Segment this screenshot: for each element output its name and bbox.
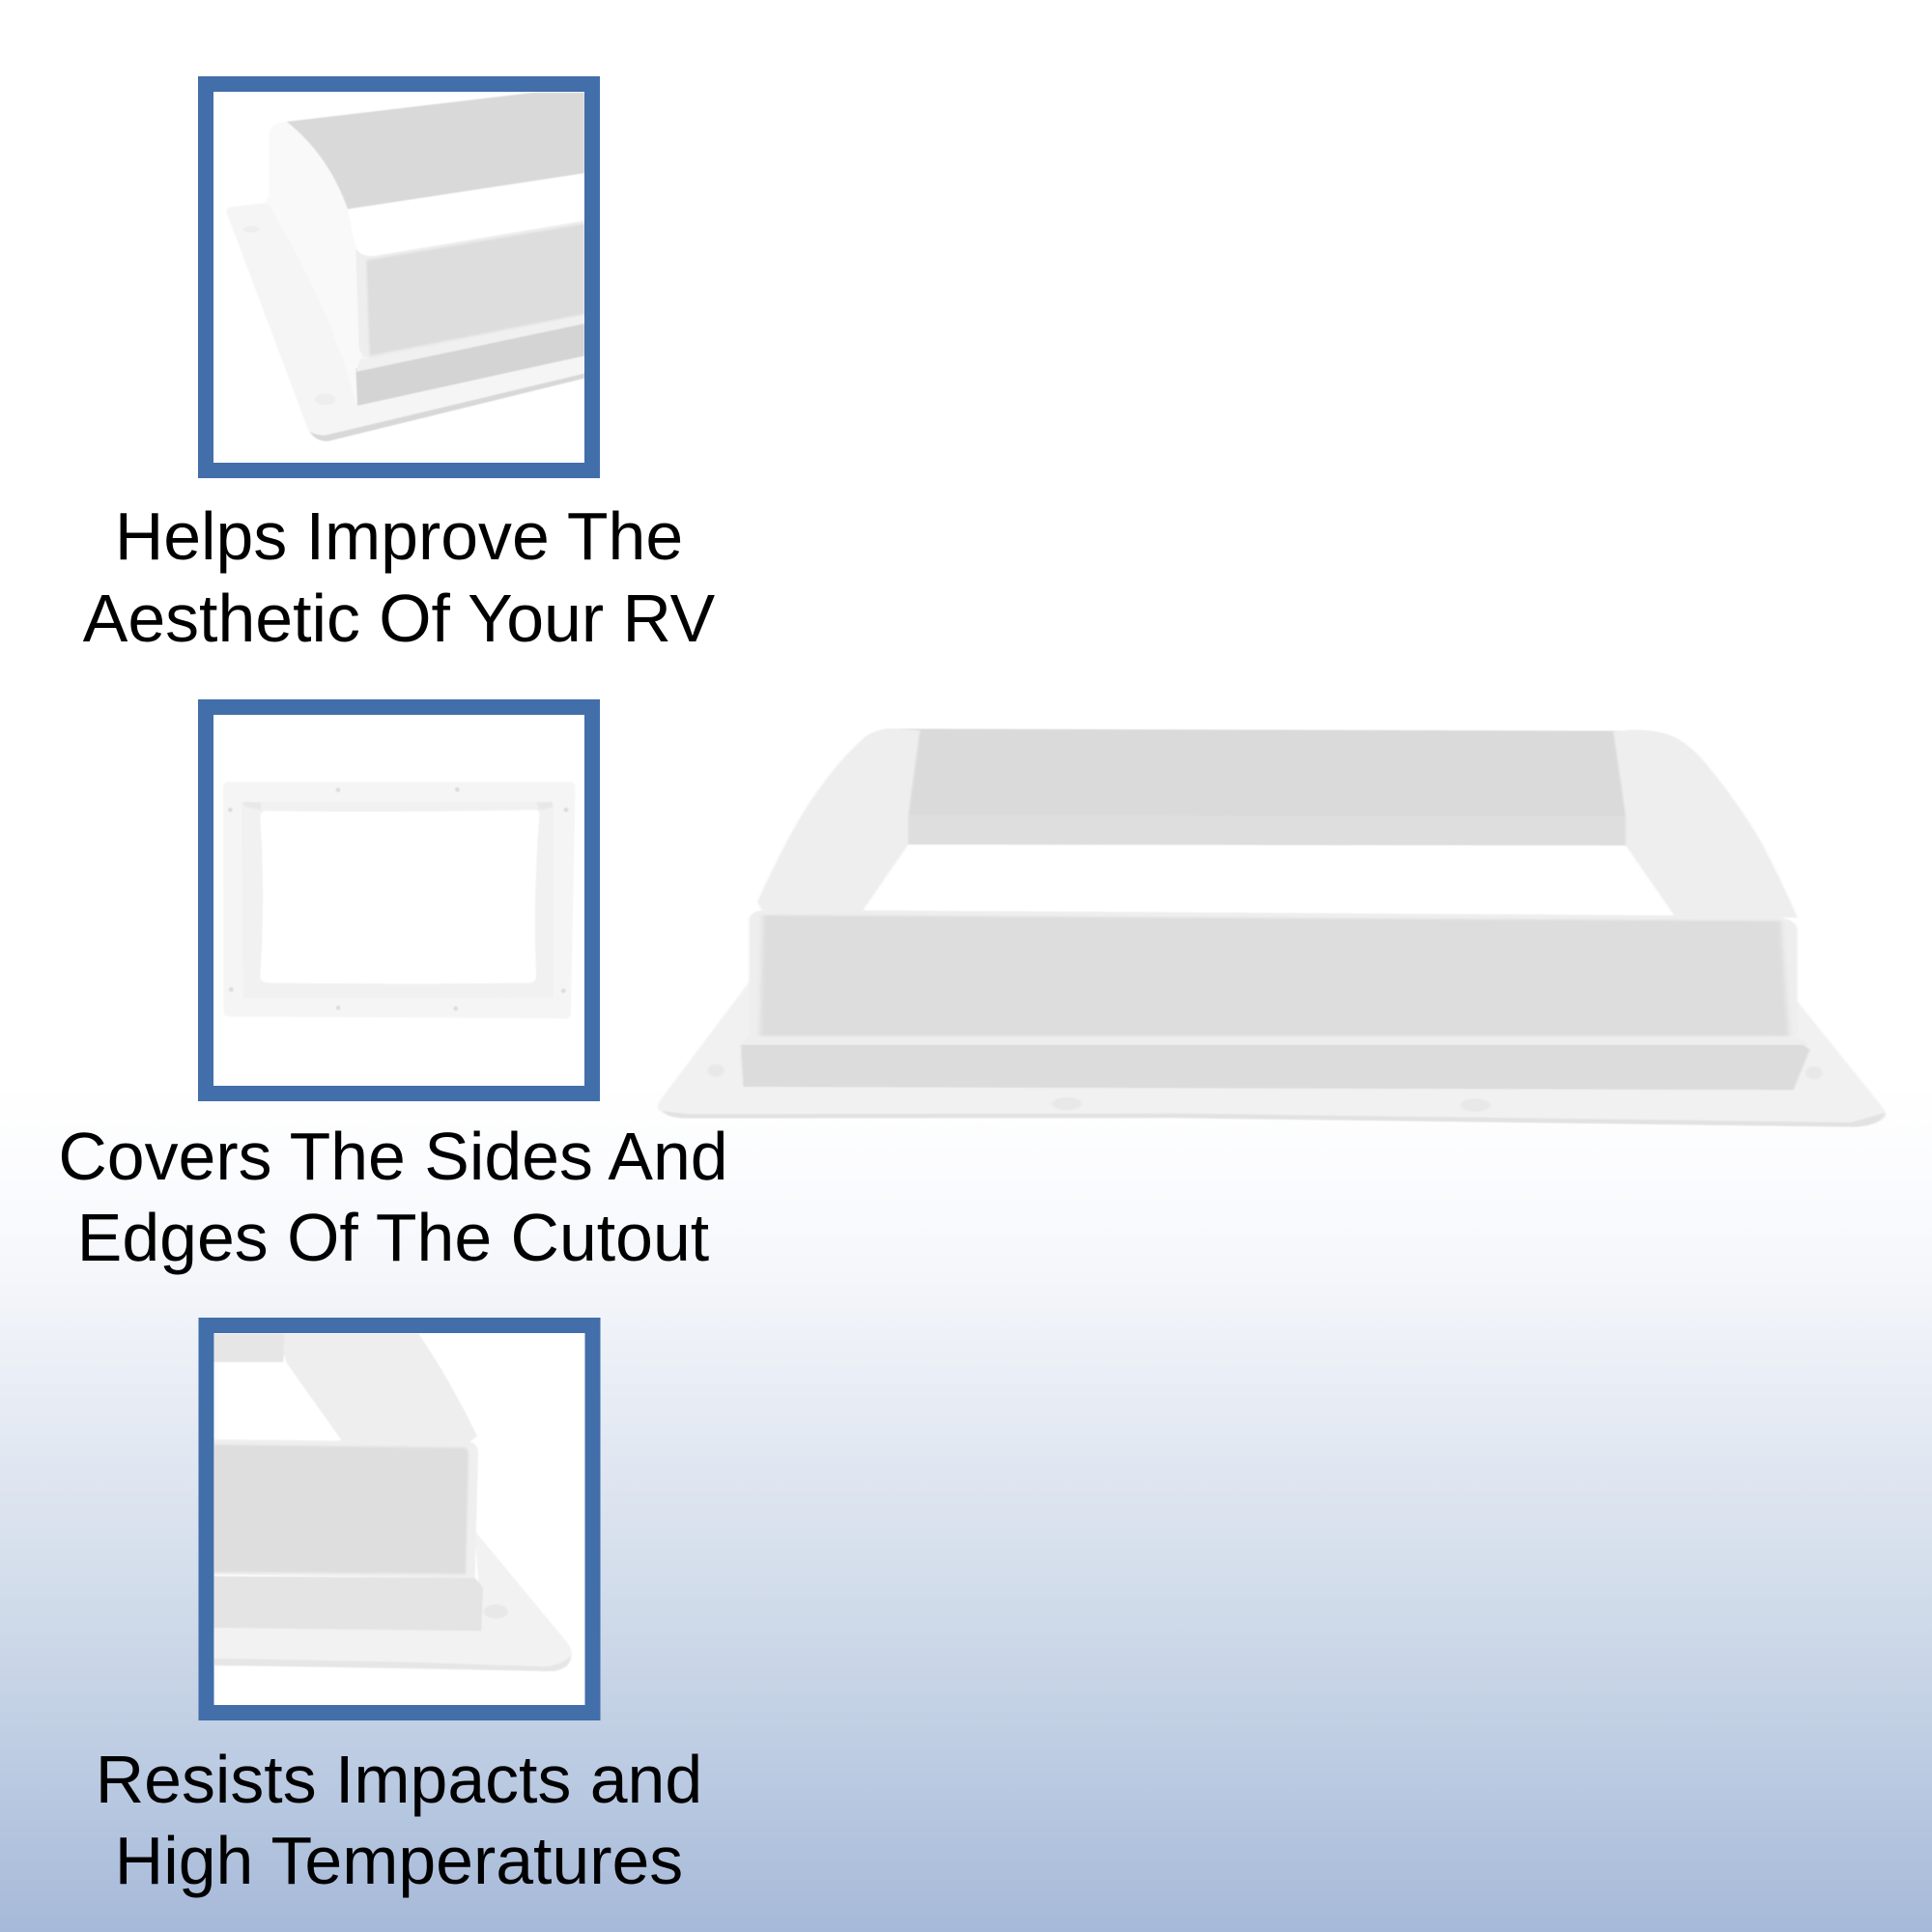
caption 2 [58,1119,728,1275]
panel: main product photo of RV vent frame [658,728,1886,1127]
panel: detail photo 1 top corner [206,84,592,470]
main product front wall [749,910,1798,1037]
frame 3 [207,1325,593,1713]
photo 2 product [223,781,576,1018]
panel: detail photo 2 front view [206,707,592,1094]
main product lower step [741,1037,1810,1090]
photo 3 product [213,1333,572,1671]
frame 2 [206,707,592,1094]
main product back wall [885,728,1640,845]
caption 2: Edges Of The Cutout [77,1200,709,1275]
caption 1 [83,498,716,656]
caption 2: Covers The Sides And [58,1119,728,1194]
caption 1: Aesthetic Of Your RV [83,581,716,656]
main product screw holes [708,1065,1822,1112]
panel: detail photo 3 corner close-up [207,1325,593,1713]
main product right inner side wall [1613,729,1798,918]
caption 1: Helps Improve The [115,498,683,574]
photo 1 product [226,93,584,441]
caption 3: Resists Impacts and [96,1742,702,1817]
caption 3: High Temperatures [115,1823,683,1898]
main product flange [658,982,1886,1125]
caption 3 [96,1742,702,1898]
frame 1 [206,84,592,470]
main product left inner side wall [757,728,920,911]
main product opening [863,844,1674,916]
